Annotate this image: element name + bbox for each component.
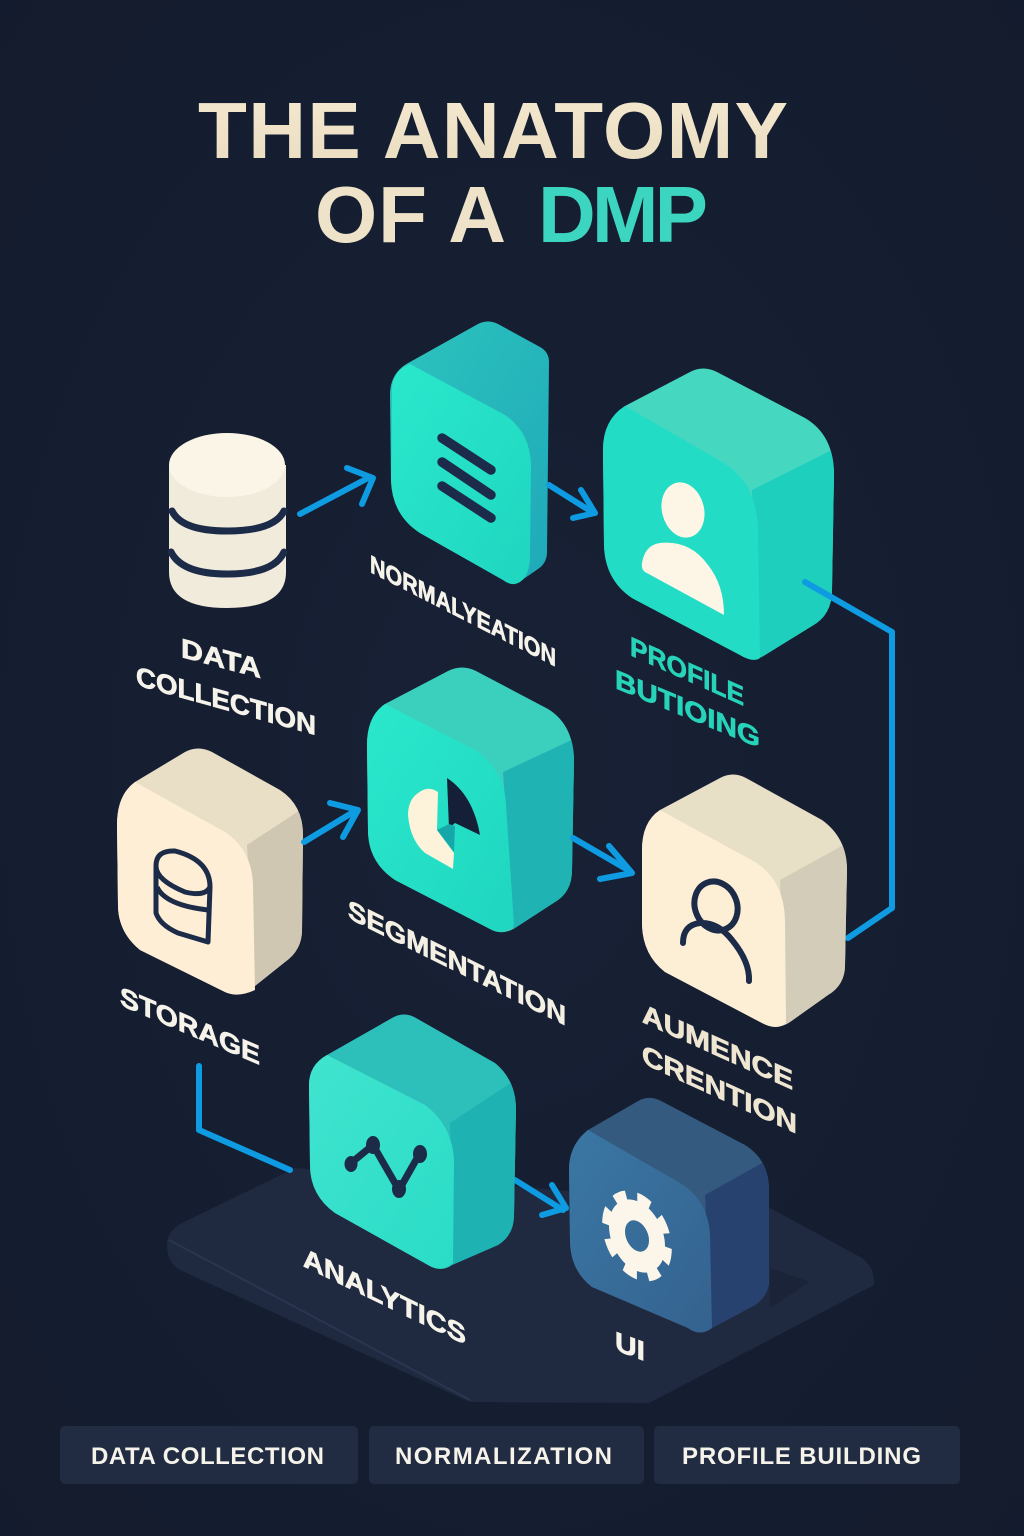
title: THE ANATOMY: [198, 86, 788, 175]
label: aumence crention: [642, 998, 797, 1141]
label: aumence crention: CRENTION: [642, 1039, 797, 1141]
label: storage: STORAGE: [120, 980, 260, 1071]
label: segmentation: SEGMENTATION: [348, 894, 566, 1033]
label: normalyeation: NORMALYEATION: [370, 549, 556, 673]
title: [198, 86, 788, 259]
title: OF A: [315, 170, 506, 259]
arrow: data collection to normalization: [300, 468, 373, 514]
label: profile butioing: BUTIOING: [615, 664, 760, 754]
block: normalization: [390, 322, 549, 584]
legend pill: normalization: NORMALIZATION: [395, 1443, 612, 1470]
block: segmentation: [367, 668, 576, 938]
icon: line chart: [344, 1136, 427, 1198]
icon: person outline: [683, 875, 749, 981]
label: aumence crention: AUMENCE: [642, 998, 793, 1097]
title: DMP: [538, 170, 708, 259]
legend pill: normalization: [369, 1426, 644, 1484]
label: analytics: ANALYTICS: [303, 1242, 466, 1352]
arrow: connector profile to audience: [805, 582, 892, 938]
arrow: analytics to ui: [515, 1180, 566, 1215]
label: profile butioing: PROFILE: [630, 630, 744, 712]
platform: [167, 1168, 874, 1403]
arrow: storage to segmentation: [304, 803, 358, 842]
arrow: storage connector to analytics: [199, 1066, 290, 1170]
label: profile butioing: [615, 630, 760, 754]
block: ui: [569, 1098, 771, 1338]
icon: pie chart: [408, 778, 480, 869]
legend pill: profile building: PROFILE BUILDING: [682, 1443, 921, 1470]
label: data collection: DATA: [181, 632, 261, 684]
block: profile building: [603, 368, 836, 668]
block: audience creation: [642, 774, 849, 1032]
label: ui: UI: [615, 1326, 645, 1367]
icon: data collection cylinder: [169, 433, 286, 608]
block: storage: [117, 748, 305, 998]
arrow: normalization to profile: [549, 485, 595, 518]
legend pill: data collection: DATA COLLECTION: [91, 1443, 324, 1470]
label: data collection: COLLECTION: [136, 660, 316, 741]
legend pill: data collection: [60, 1426, 358, 1484]
icon: person: [642, 478, 724, 615]
legend pill: profile building: [654, 1426, 960, 1484]
icon: gear: [607, 1187, 667, 1285]
block: analytics: [309, 1014, 518, 1272]
icon: database outline: [156, 851, 210, 942]
icon: document lines: [442, 438, 491, 518]
arrow: segmentation to audience: [573, 838, 632, 879]
